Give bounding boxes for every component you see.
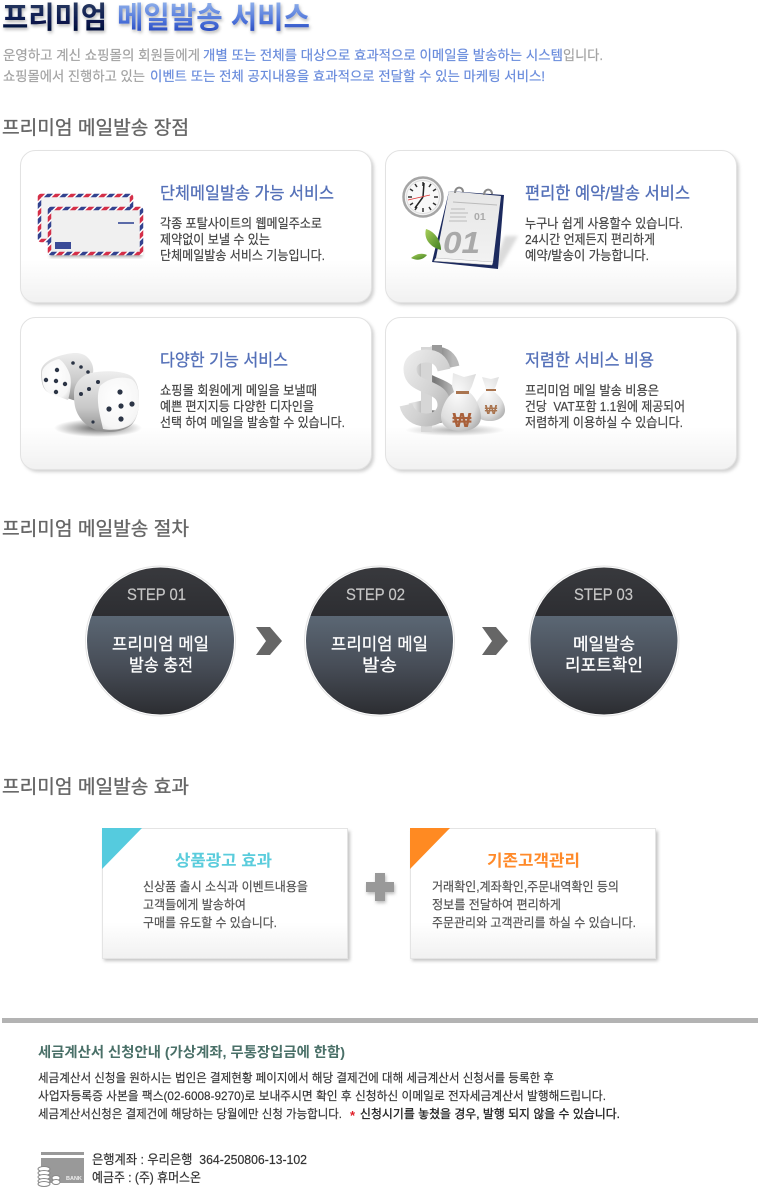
icon: bank card and coins: BANK: [66, 1176, 82, 1182]
plus icon: [366, 873, 395, 903]
effect title: 상품광고 효과: [175, 852, 272, 870]
tax invoice text: 사업자등록증 사본을 팩스(02-6008-9270)로 보내주시면 확인 후 신청하신 이메일로 전자세금계산서 발행해드립니다.: [38, 1088, 606, 1103]
panel: low cost: [386, 318, 739, 472]
card title: 다양한 기능 서비스: [160, 351, 288, 370]
heading: advantages: 프리미엄 메일발송 장점: [2, 117, 189, 139]
intro text: 입니다.: [563, 48, 603, 63]
icon: clock and calendar: 01: [443, 225, 480, 260]
effect text: [432, 880, 636, 930]
icon: dollar sign and money bags: [405, 345, 505, 436]
card title: 편리한 예약/발송 서비스: [525, 184, 690, 203]
card text: 예쁜 편지지등 다양한 디자인을: [160, 399, 314, 414]
arrow: [482, 627, 508, 655]
intro text: 개별 또는 전체를 대상으로 효과적으로 이메일을 발송하는 시스템: [203, 48, 563, 63]
tax invoice text: [38, 1071, 620, 1123]
effect text: [143, 880, 308, 930]
title: [2, 2, 310, 35]
intro text: 이벤트 또는 전체 공지내용을 효과적으로 전달할 수 있는 마케팅 서비스!: [150, 69, 545, 84]
intro text: [3, 48, 603, 84]
icon: dollar sign and money bags: ₩: [453, 410, 472, 432]
effect text: 주문관리와 고객관리를 하실 수 있습니다.: [432, 916, 636, 930]
bank account info: 예금주 : (주) 휴머스온: [92, 1170, 201, 1185]
step text: 프리미엄 메일: [112, 635, 209, 654]
card text: 쇼핑몰 회원에게 메일을 보낼때: [160, 383, 317, 398]
card text: 제약없이 보낼 수 있는: [160, 232, 270, 247]
card text: 24시간 언제든지 편리하게: [525, 232, 655, 247]
icon: dollar sign and money bags: ₩: [485, 402, 498, 417]
icon: clock and calendar: 01: [474, 211, 486, 223]
step text: 발송: [362, 656, 397, 675]
step text: 발송 충전: [129, 656, 193, 675]
card text: 단체메일발송 서비스 기능입니다.: [160, 248, 325, 263]
tax invoice text: *: [350, 1108, 356, 1123]
step text: [565, 635, 643, 675]
bank account info: [92, 1152, 307, 1185]
icon: dice: [41, 353, 142, 437]
title: 프리미엄: [2, 2, 107, 35]
step 2: [300, 560, 460, 716]
step text: 리포트확인: [565, 656, 643, 675]
card text: 각종 포탈사이트의 웹메일주소로: [160, 216, 322, 231]
effect text: 신상품 출시 소식과 이벤트내용을: [143, 880, 308, 894]
effect text: 구매를 유도할 수 있습니다.: [143, 916, 277, 930]
card text: [525, 216, 683, 263]
panel: customer management: [410, 828, 658, 961]
tax invoice text: 세금계산서 신청을 원하시는 법인은 결제현황 페이지에서 해당 결제건에 대해 세금계산서 신청서를 등록한 후: [38, 1071, 554, 1085]
card text: [525, 383, 685, 430]
card text: 선택 하여 메일을 발송할 수 있습니다.: [160, 415, 345, 430]
tax invoice heading: 세금계산서 신청안내 (가상계좌, 무통장입금에 한함): [38, 1044, 345, 1060]
title: 메일발송 서비스: [117, 2, 310, 35]
panel: product ad effect: [102, 828, 350, 961]
step label: STEP 03: [574, 585, 633, 604]
tax invoice text: 세금계산서신청은 결제건에 해당하는 당월에만 신청 가능합니다.: [38, 1107, 342, 1121]
arrow: [256, 627, 282, 655]
card text: 프리미엄 메일 발송 비용은: [525, 383, 659, 398]
step text: 프리미엄 메일: [331, 635, 428, 654]
panel: reservation service: [386, 150, 739, 305]
intro text: 쇼핑몰에서 진행하고 있는: [3, 69, 145, 84]
card text: 저렴하게 이용하실 수 있습니다.: [525, 415, 683, 430]
step label: STEP 01: [127, 585, 186, 604]
tax invoice text: 신청시기를 놓쳤을 경우, 발행 되지 않을 수 있습니다.: [360, 1106, 620, 1121]
panel: bulk mail service: [20, 150, 374, 305]
step label: STEP 02: [346, 585, 405, 604]
icon: bank card and coins: [38, 1152, 84, 1186]
card text: [160, 383, 345, 430]
icon: airmail envelopes: [40, 196, 143, 257]
step 1: [80, 560, 240, 716]
corner triangle: [102, 828, 142, 869]
card text: 누구나 쉽게 사용할수 있습니다.: [525, 216, 683, 231]
card text: 예약/발송이 가능합니다.: [525, 248, 649, 263]
bank account info: 은행계좌 : 우리은행 364-250806-13-102: [92, 1152, 307, 1167]
effect text: 거래확인,계좌확인,주문내역확인 등의: [432, 880, 619, 894]
intro text: 운영하고 계신 쇼핑몰의 회원들에게: [3, 48, 200, 63]
card text: [160, 216, 325, 263]
icon: clock and calendar: [404, 178, 518, 269]
heading: effects: 프리미엄 메일발송 효과: [2, 776, 189, 798]
step text: [331, 635, 428, 675]
step 3: [525, 560, 685, 716]
effect title: 기존고객관리: [487, 852, 580, 870]
step text: [112, 635, 209, 675]
card title: 저렴한 서비스 비용: [525, 351, 654, 370]
step text: 메일발송: [573, 635, 635, 654]
corner triangle: [410, 828, 450, 869]
effect text: 정보를 전달하여 편리하게: [432, 898, 561, 912]
effect text: 고객들에게 발송하여: [143, 898, 246, 912]
panel: various features: [20, 318, 374, 472]
card text: 건당 VAT포함 1.1원에 제공되어: [525, 399, 685, 414]
card title: 단체메일발송 가능 서비스: [160, 184, 334, 203]
heading: procedure: 프리미엄 메일발송 절차: [2, 518, 189, 540]
